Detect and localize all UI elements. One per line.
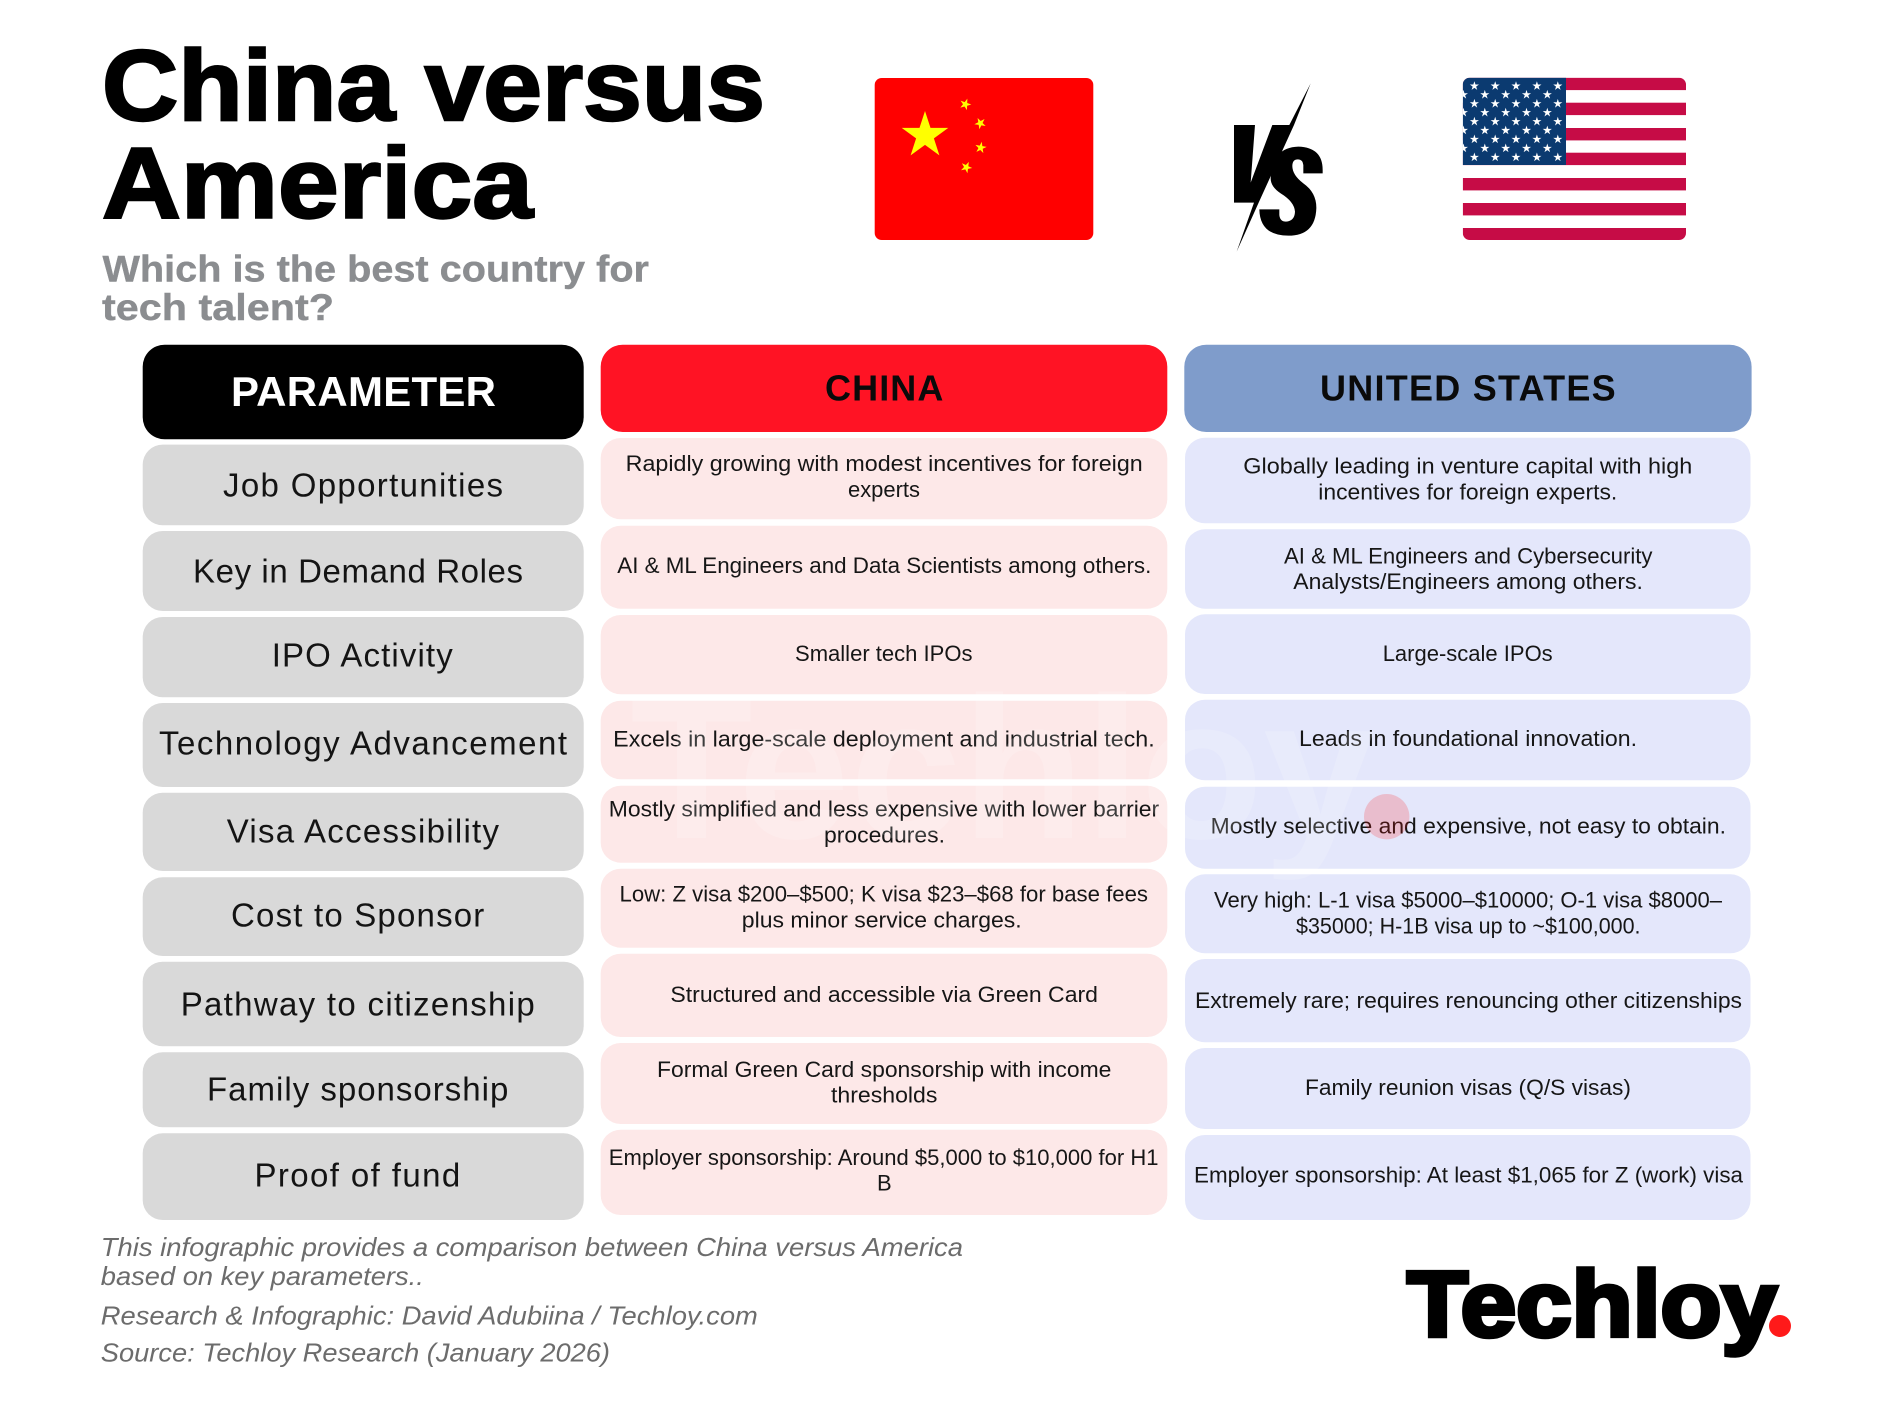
cell: China technology: Excels in large-scale deployment and industrial tech. <box>613 727 1155 752</box>
cell: China key roles <box>601 526 1167 609</box>
row label: job opportunities: Job Opportunities <box>223 467 503 504</box>
cell: US technology: Leads in foundational innovation. <box>1299 726 1637 751</box>
title <box>102 30 765 240</box>
row label: job opportunities <box>143 445 584 525</box>
row label: pathway to citizenship <box>143 962 584 1046</box>
row label: cost to sponsor: Cost to Sponsor <box>231 897 484 934</box>
header: parameter <box>143 345 584 439</box>
row label: IPO activity: IPO Activity <box>272 637 453 674</box>
cell: China key roles: AI & ML Engineers and Data Scientists among others. <box>617 553 1151 578</box>
cell: China visa: procedures. <box>824 823 945 848</box>
header: parameter: PARAMETER <box>231 368 496 415</box>
row label: visa accessibility: Visa Accessibility <box>227 813 499 850</box>
cell: US key roles: Analysts/Engineers among others. <box>1293 569 1643 594</box>
cell: China proof of fund: Employer sponsorship: Around $5,000 to $10,000 for H1 <box>609 1145 1158 1170</box>
cell: China IPO activity: Smaller tech IPOs <box>795 641 972 666</box>
icon: United States flag <box>1459 78 1686 240</box>
cell: US key roles: AI & ML Engineers and Cybersecurity <box>1284 543 1652 568</box>
cell: China family: Formal Green Card sponsorship with income <box>657 1057 1111 1082</box>
cell: China job opportunities: Rapidly growing with modest incentives for foreign <box>626 451 1143 476</box>
cell: US citizenship <box>1185 959 1750 1042</box>
cell: China proof of fund <box>601 1130 1167 1215</box>
cell: China IPO activity <box>601 615 1167 694</box>
cell: China proof of fund: B <box>877 1171 892 1196</box>
cell: US key roles <box>1185 529 1750 609</box>
row label: key in demand roles: Key in Demand Roles <box>193 553 523 590</box>
cell: US proof of fund: Employer sponsorship: At least $1,065 for Z (work) visa <box>1194 1162 1744 1187</box>
cell: US visa: Mostly selective and expensive, not easy to obtain. <box>1211 813 1726 838</box>
row label: technology advancement: Technology Advancement <box>159 724 567 761</box>
header: China: CHINA <box>825 368 943 408</box>
cell: US IPO activity: Large-scale IPOs <box>1383 641 1553 666</box>
icon: versus mark <box>1234 83 1323 252</box>
cell: China citizenship: Structured and accessible via Green Card <box>670 982 1098 1007</box>
title: China versus <box>102 30 765 142</box>
footer note: based on key parameters.. <box>101 1261 424 1291</box>
cell: US job opportunities: incentives for foreign experts. <box>1318 479 1617 504</box>
cell: US job opportunities: Globally leading in venture capital with high <box>1243 453 1692 478</box>
row label: family sponsorship: Family sponsorship <box>207 1071 508 1108</box>
cell: China citizenship <box>601 954 1167 1037</box>
cell: US IPO activity <box>1185 614 1750 694</box>
cell: China family: thresholds <box>831 1082 937 1107</box>
row label: pathway to citizenship: Pathway to citizenship <box>181 986 535 1023</box>
header: United States <box>1184 345 1752 432</box>
row label: family sponsorship <box>143 1052 584 1127</box>
cell: China family <box>601 1043 1167 1124</box>
logo: Techloy: Techloy <box>1407 1252 1777 1356</box>
row label: proof of fund <box>143 1133 584 1220</box>
cell: China job opportunities <box>601 438 1167 519</box>
footer note: Source: Techloy Research (January 2026) <box>101 1338 610 1368</box>
icon: China flag <box>875 78 1093 240</box>
cell: US cost: Very high: L-1 visa $5000–$10000; O-1 visa $8000– <box>1214 887 1723 912</box>
cell: China visa: Mostly simplified and less expensive with lower barrier <box>609 797 1159 822</box>
footer note <box>101 1232 963 1368</box>
row label: proof of fund: Proof of fund <box>254 1157 460 1194</box>
cell: China cost: Low: Z visa $200–$500; K visa $23–$68 for base fees <box>620 882 1148 907</box>
cell: China cost <box>601 869 1167 948</box>
cell: China visa <box>601 786 1167 863</box>
subtitle: tech talent? <box>102 287 334 328</box>
title: America <box>102 128 535 240</box>
panel: China column <box>601 345 1167 1215</box>
footer note: Research & Infographic: David Adubiina / Techloy.com <box>101 1300 758 1330</box>
cell: US cost <box>1185 874 1750 953</box>
cell: US cost: $35000; H-1B visa up to ~$100,000. <box>1296 914 1640 939</box>
panel: United States column <box>1184 345 1752 1220</box>
subtitle: Which is the best country for <box>102 249 649 290</box>
cell: US job opportunities <box>1185 438 1750 523</box>
cell: China cost: plus minor service charges. <box>742 908 1022 933</box>
cell: US family <box>1185 1048 1750 1129</box>
row label: cost to sponsor <box>143 877 584 956</box>
footer note: This infographic provides a comparison between China versus America <box>101 1232 963 1262</box>
cell: US citizenship: Extremely rare; requires renouncing other citizenships <box>1195 988 1742 1013</box>
row label: technology advancement <box>143 703 584 787</box>
cell: US family: Family reunion visas (Q/S visas) <box>1305 1075 1631 1100</box>
header: China <box>601 345 1167 432</box>
row label: key in demand roles <box>143 531 584 611</box>
row label: IPO activity <box>143 617 584 697</box>
cell: US technology <box>1185 700 1750 780</box>
cell: China job opportunities: experts <box>848 477 920 502</box>
row label: visa accessibility <box>143 793 584 871</box>
header: United States: UNITED STATES <box>1320 367 1616 408</box>
subtitle <box>102 249 649 328</box>
cell: US proof of fund <box>1185 1135 1750 1220</box>
cell: China technology <box>601 701 1167 779</box>
watermark: Techloy logo: Techloy <box>630 655 1375 881</box>
panel: parameter column <box>143 345 584 1220</box>
cell: US visa <box>1185 787 1750 869</box>
